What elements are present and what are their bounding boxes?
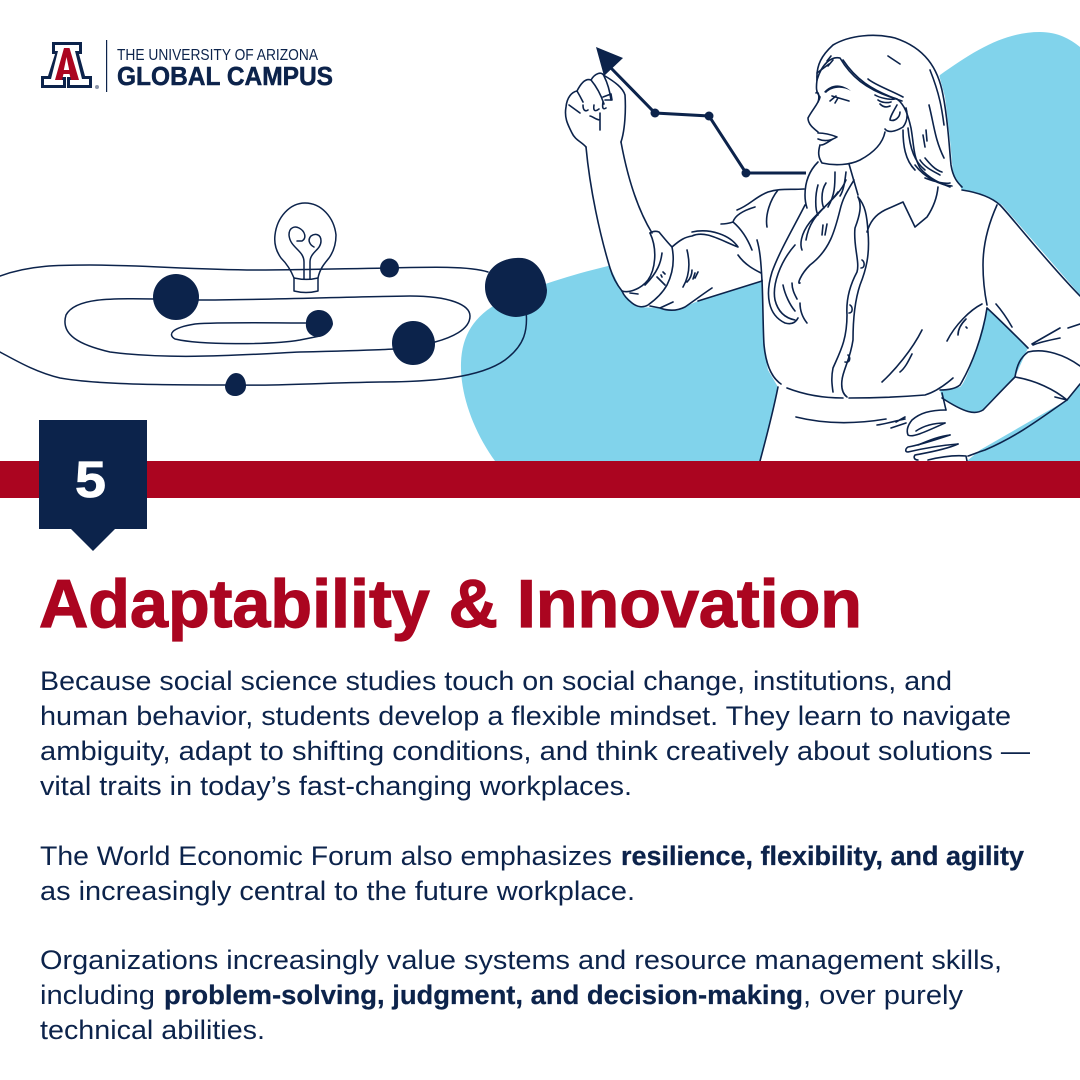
paragraph: World Economic Forum: The World Economic Forum also emphasizes — [40, 841, 612, 871]
paragraph: organizations value skills: , over purely — [803, 980, 964, 1010]
paragraph: flexible mindset: Because social science studies touch on social change, institutions, and — [40, 666, 952, 696]
paragraph: World Economic Forum: resilience, flexibility, and agility — [621, 841, 1024, 871]
paragraph: organizations value skills — [40, 945, 1002, 1045]
head and face — [808, 35, 962, 187]
number 5: 5 — [75, 451, 106, 508]
icon: lightbulb — [275, 203, 336, 292]
eyebrow — [824, 85, 851, 93]
paragraph: flexible mindset — [40, 666, 1030, 801]
shirt, hair lock and torso — [760, 162, 1080, 461]
paragraph: flexible mindset: human behavior, students develop a flexible mindset. They learn to navigate — [40, 701, 1011, 731]
paragraph: World Economic Forum — [40, 841, 1024, 906]
illustration: woman pointing at rising line chart — [565, 35, 1080, 461]
winding path line — [0, 265, 488, 276]
icon: block A — [41, 42, 99, 89]
line chart arrow — [596, 47, 806, 178]
step number badge — [39, 420, 147, 551]
logo line: Global Campus: GLOBAL CAMPUS — [117, 63, 333, 91]
paragraph: organizations value skills: including — [40, 980, 155, 1010]
illustration: winding path with lightbulb — [0, 203, 547, 396]
paragraph: organizations value skills: Organizations increasingly value systems and resource management skills, — [40, 945, 1002, 975]
figure silhouette — [566, 35, 1080, 461]
paragraph: flexible mindset: vital traits in today’s fast-changing workplaces. — [40, 771, 632, 801]
paragraph: organizations value skills: problem-solving, judgment, and decision-making — [164, 980, 803, 1010]
paragraph: organizations value skills: technical abilities. — [40, 1015, 265, 1045]
paragraph: World Economic Forum: as increasingly central to the future workplace. — [40, 876, 635, 906]
light blue background blob — [461, 32, 1080, 461]
paragraph: flexible mindset: ambiguity, adapt to shifting conditions, and think creatively about solutions — — [40, 736, 1030, 766]
title: Adaptability & Innovation — [39, 566, 862, 642]
logo: University of Arizona Global Campus — [41, 40, 333, 92]
red horizontal band — [0, 461, 1080, 498]
logo line: university name: THE UNIVERSITY OF ARIZONA — [117, 47, 319, 64]
path node dots — [153, 258, 547, 396]
rolled sleeve of raised arm — [622, 189, 804, 310]
raised fist and arm — [565, 73, 652, 291]
